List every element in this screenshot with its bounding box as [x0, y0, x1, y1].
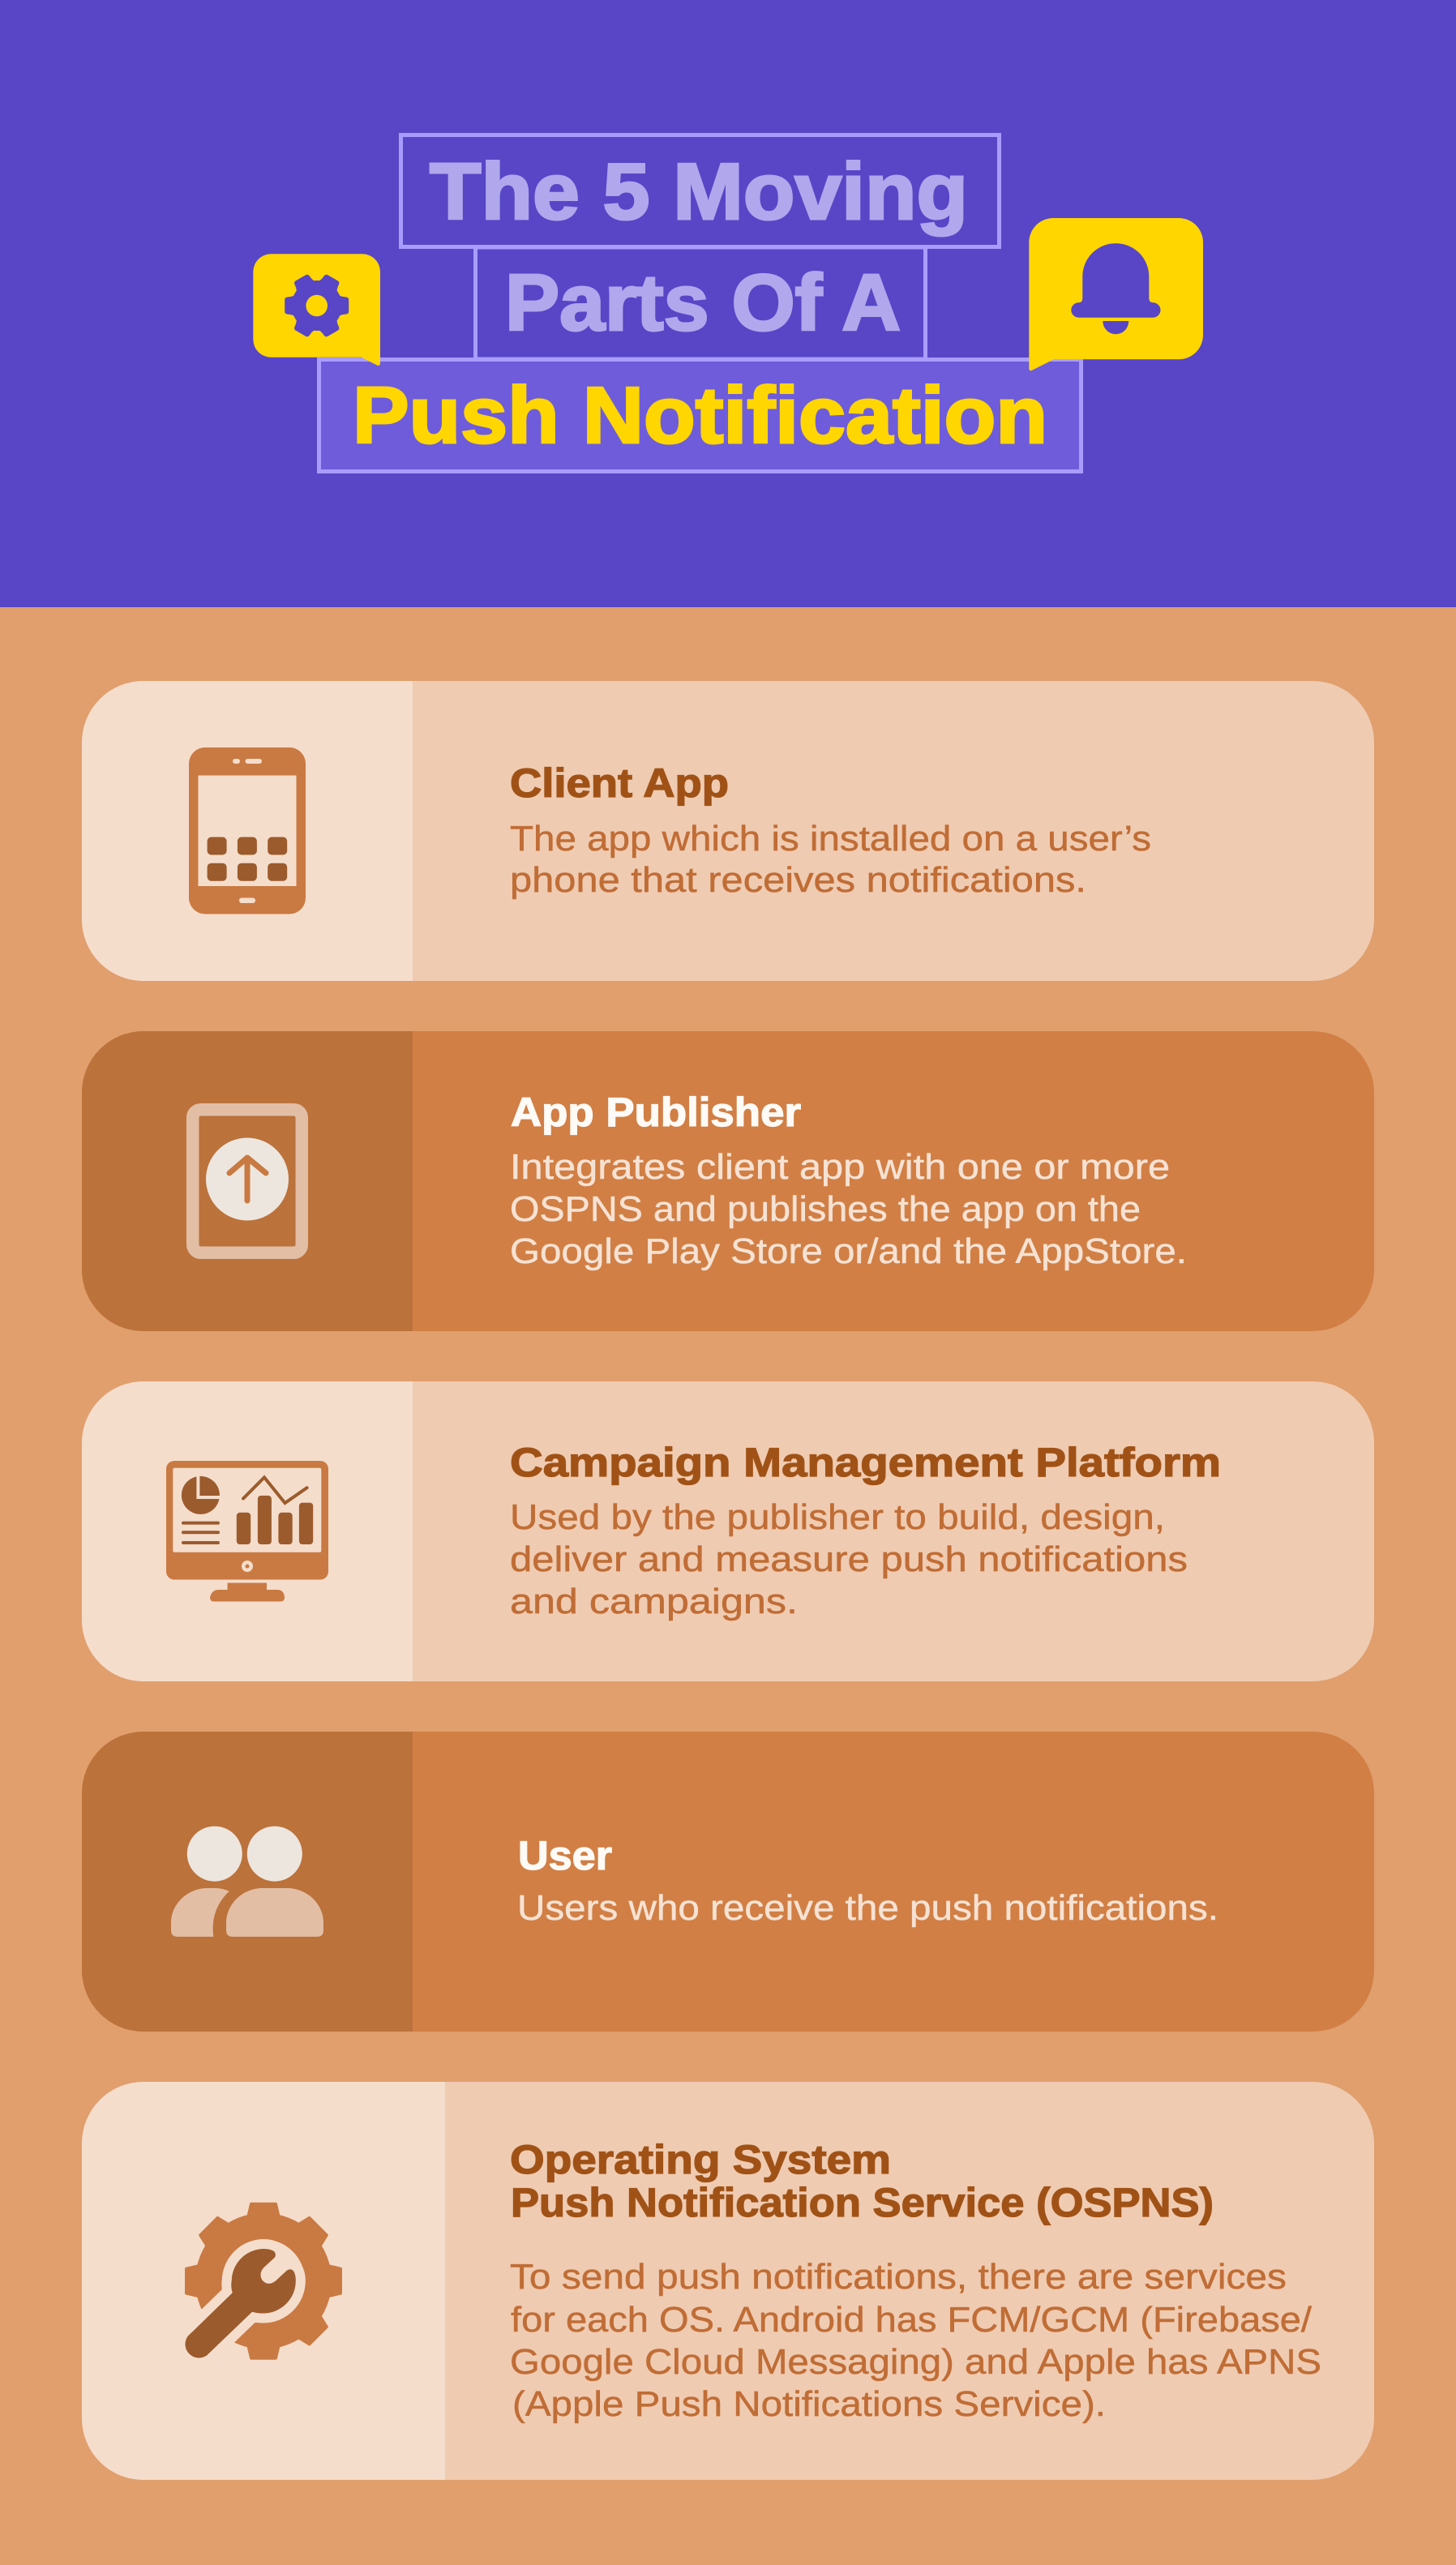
icon: gear with wrench: [185, 2204, 340, 2358]
text: ospns: Push Notification Service (OSPNS): [511, 2180, 1214, 2225]
icon: two users: [171, 1826, 323, 1937]
title: Push Notification: [353, 370, 1047, 460]
text: app publisher: [510, 1090, 1187, 1271]
text: client app: The app which is installed on a user’s: [510, 819, 1151, 859]
panel: campaign management platform: [82, 1381, 1374, 1681]
icon: smartphone with apps: [189, 747, 306, 914]
header band: [0, 0, 1456, 607]
text: ospns: Google Cloud Messaging) and Apple has APNS: [510, 2342, 1321, 2382]
text: client app: [510, 760, 1151, 900]
text: campaign management platform: [510, 1440, 1221, 1621]
text: user: [517, 1833, 1218, 1928]
text: ospns: (Apple Push Notifications Service).: [512, 2384, 1106, 2424]
icon: bell speech bubble: [1029, 218, 1203, 370]
text: app publisher: Google Play Store or/and the AppStore.: [510, 1231, 1187, 1271]
text: user: User: [518, 1833, 612, 1878]
icon: analytics monitor: [166, 1461, 328, 1602]
text: ospns: Operating System: [510, 2137, 891, 2182]
text: app publisher: App Publisher: [511, 1090, 801, 1135]
text: client app: Client App: [510, 760, 729, 806]
title: The 5 Moving: [430, 147, 968, 236]
panel: client app: [82, 681, 1374, 981]
icon: tablet with upload arrow: [193, 1110, 302, 1253]
text: ospns: for each OS. Android has FCM/GCM (Firebase/: [511, 2300, 1313, 2340]
text: campaign management platform: deliver and measure push notifications: [510, 1539, 1188, 1579]
title box: line 3: [319, 360, 1081, 472]
text: user: Users who receive the push notifications.: [517, 1888, 1218, 1928]
text: app publisher: OSPNS and publishes the app on the: [510, 1189, 1141, 1229]
text: ospns: [510, 2137, 1321, 2424]
title: Parts Of A: [505, 258, 901, 347]
text: app publisher: Integrates client app with one or more: [510, 1147, 1170, 1187]
title box: line 1: [400, 135, 999, 246]
panel: operating system push notification service: [82, 2082, 1374, 2480]
text: campaign management platform: Campaign Management Platform: [510, 1440, 1221, 1485]
text: ospns: To send push notifications, there are services: [510, 2257, 1287, 2297]
panel: app publisher: [82, 1031, 1374, 1331]
panel: user: [82, 1732, 1374, 2032]
text: campaign management platform: Used by the publisher to build, design,: [510, 1497, 1165, 1537]
title: [353, 147, 1047, 460]
text: client app: phone that receives notifications.: [510, 860, 1086, 900]
icon: gear speech bubble: [253, 254, 380, 366]
title box: line 2: [475, 247, 926, 359]
text: campaign management platform: and campaigns.: [510, 1582, 798, 1621]
